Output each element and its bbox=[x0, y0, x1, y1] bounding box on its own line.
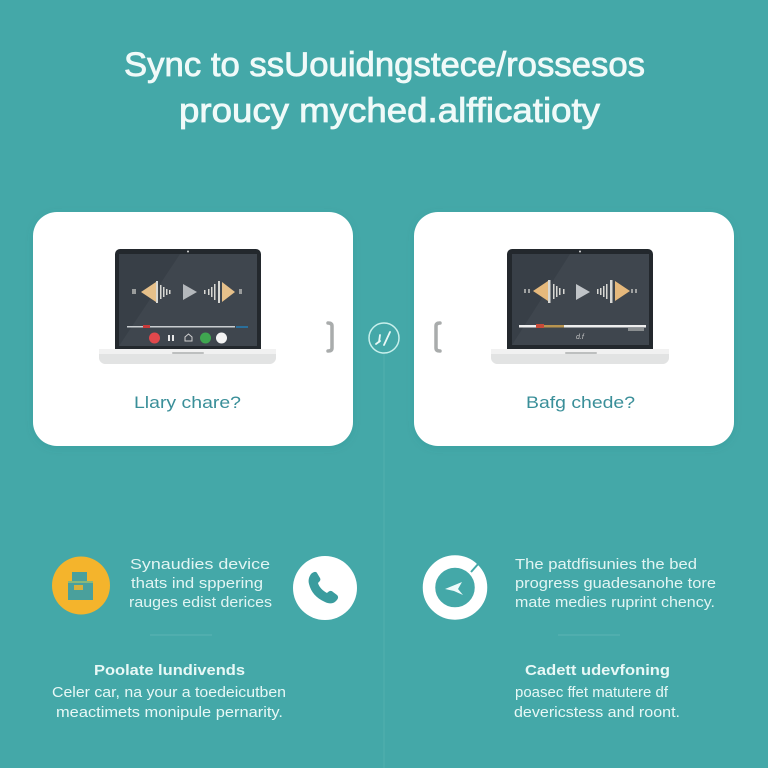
icon: yellow briefcase bbox=[52, 556, 110, 614]
text: right description bbox=[515, 556, 716, 611]
title: proucy myched.alfficatioty bbox=[179, 92, 600, 130]
text: right bottom block: Cadett udevfoning bbox=[525, 662, 670, 679]
icon: right laptop bbox=[491, 249, 669, 364]
icon: ring with plane bbox=[429, 562, 481, 614]
text: left bottom block: meactimets monipule pernarity. bbox=[56, 704, 283, 721]
panel: left card bbox=[33, 212, 353, 446]
text: right bottom block: poasec ffet matutere df bbox=[515, 684, 669, 701]
title bbox=[124, 46, 645, 130]
text: left description: Synaudies device bbox=[130, 556, 270, 573]
text: right description: mate medies ruprint chency. bbox=[515, 594, 715, 611]
text: right bottom block: devericstess and roont. bbox=[514, 704, 680, 721]
text: left description: thats ind sppering bbox=[131, 575, 263, 592]
handle: left card bbox=[328, 323, 332, 351]
icon: center check badge bbox=[369, 323, 399, 353]
text: left description: rauges edist derices bbox=[129, 594, 272, 611]
text: right bottom block bbox=[514, 662, 680, 721]
label: left card: Llary chare? bbox=[134, 393, 241, 412]
icon: phone bbox=[293, 556, 357, 620]
text: left bottom block: Celer car, na your a toedeicutben bbox=[52, 684, 286, 701]
panel: right card bbox=[414, 212, 734, 446]
text: right description: The patdfisunies the bed bbox=[515, 556, 697, 573]
text: left bottom block: Poolate lundivends bbox=[94, 662, 245, 679]
text: left description bbox=[129, 556, 272, 611]
text: left bottom block bbox=[52, 662, 286, 721]
icon: right laptop: d.f bbox=[576, 334, 585, 341]
text: right description: progress guadesanohe tore bbox=[515, 575, 716, 592]
title: Sync to ssUouidngstece/rossesos bbox=[124, 46, 645, 84]
icon: left laptop bbox=[99, 249, 276, 364]
handle: right card bbox=[436, 323, 440, 351]
label: right card: Bafg chede? bbox=[526, 393, 635, 412]
